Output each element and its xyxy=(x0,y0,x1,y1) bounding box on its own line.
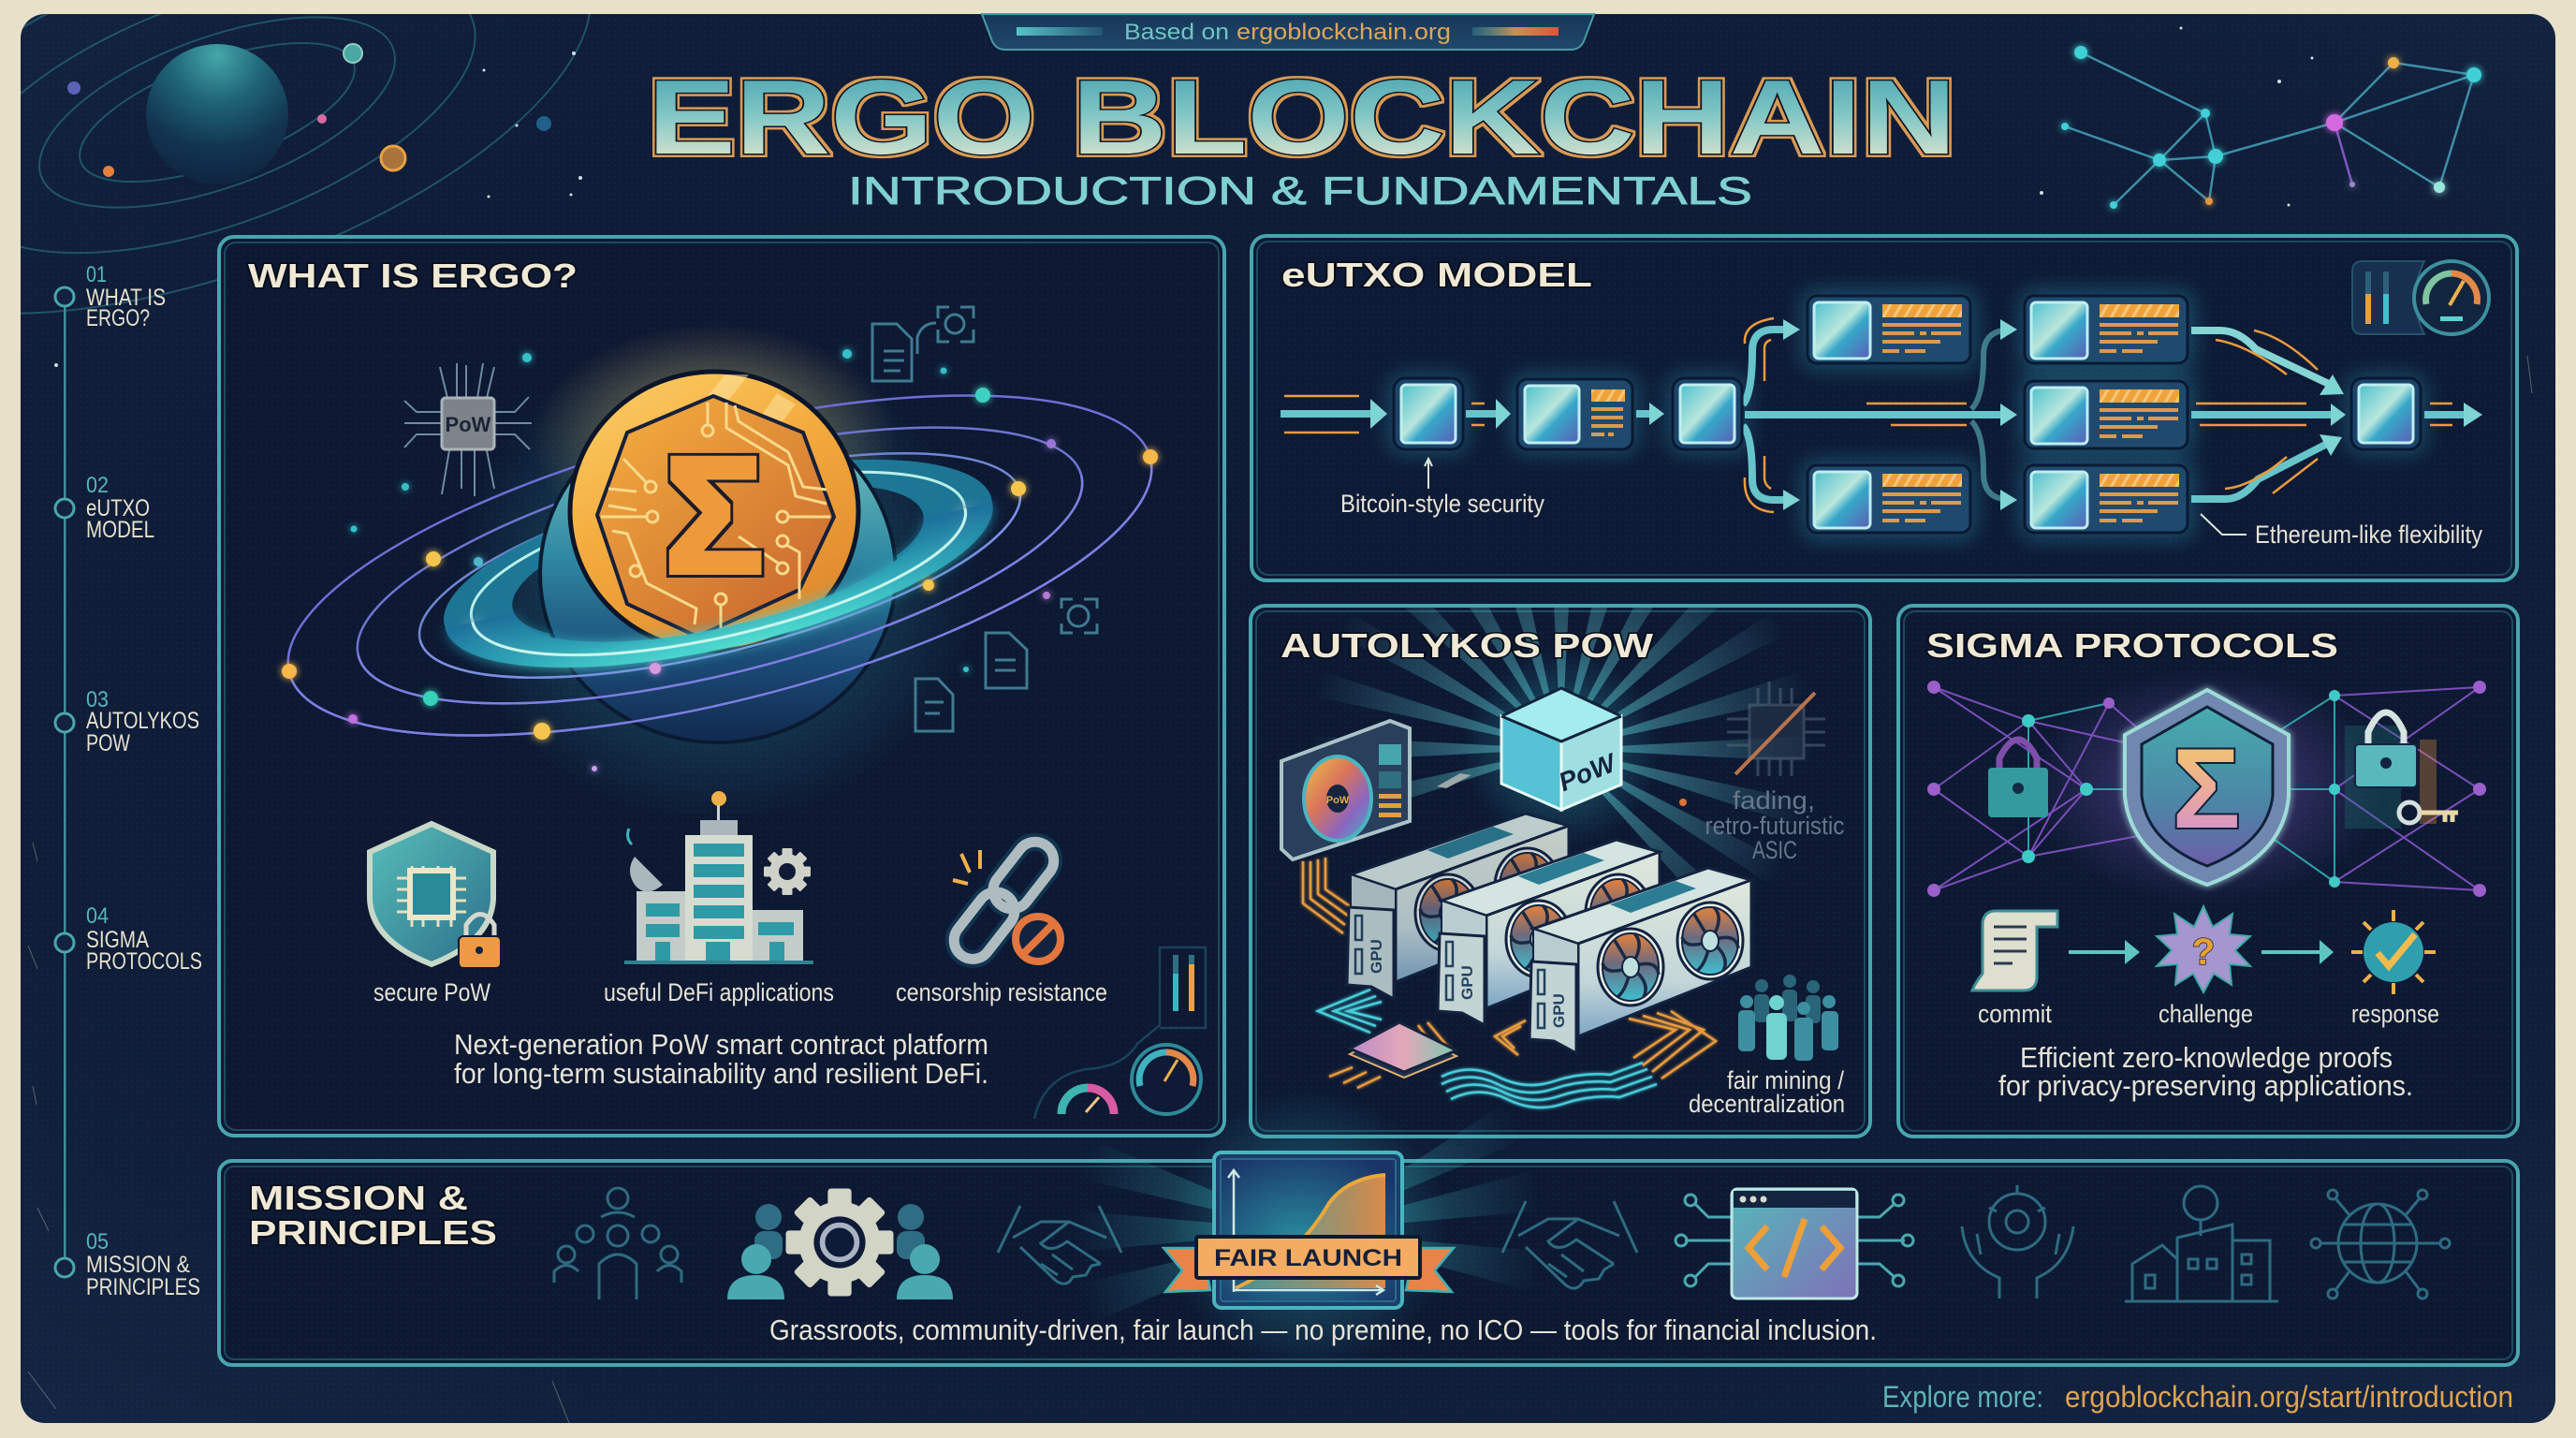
nav item 02 xyxy=(86,473,154,543)
nav item 05: 05 xyxy=(86,1229,109,1255)
label: Bitcoin-style security xyxy=(1340,459,1544,518)
description: for long-term sustainability and resilient DeFi. xyxy=(454,1057,988,1090)
title: ERGO BLOCKCHAIN xyxy=(648,58,1956,176)
icon: challenge star xyxy=(2157,906,2250,992)
label: fair mining xyxy=(1689,1066,1845,1118)
icon: globe network xyxy=(2311,1190,2450,1299)
source tab: Based on xyxy=(1124,20,1229,45)
icon: PoW chip: PoW xyxy=(446,413,491,436)
heading: eUTXO MODEL xyxy=(1281,256,1592,294)
icon: GPU display panel: PoW xyxy=(1326,795,1350,806)
icon: secure PoW shield xyxy=(370,824,501,968)
nav item 03 xyxy=(86,687,199,756)
label: response: response xyxy=(2351,1000,2439,1028)
icon: bright lock and key xyxy=(2345,712,2458,829)
icon: faded ASIC xyxy=(1727,682,1825,776)
label: censorship resistance: censorship resistance xyxy=(896,978,1107,1006)
source tab xyxy=(982,14,1594,50)
panel: autolykos pow xyxy=(1249,604,1872,1138)
icon: hands with gear xyxy=(1962,1185,2073,1299)
heading: AUTOLYKOS POW xyxy=(1281,626,1653,665)
icon: glowing PoW cube xyxy=(1463,651,1660,847)
icon: handshake left xyxy=(998,1206,1121,1284)
icon: contract documents bottom xyxy=(915,599,1097,731)
icon: code window xyxy=(1676,1189,1913,1299)
nav item 01 xyxy=(86,262,166,331)
heading xyxy=(249,1179,497,1252)
arrow xyxy=(2069,940,2140,964)
network illustration xyxy=(1927,669,2486,903)
description: Efficient zero-knowledge proofs xyxy=(2020,1041,2393,1074)
panel: mission and principles xyxy=(219,1091,2518,1372)
nav item 01: 01 xyxy=(86,262,107,287)
label: fair mining: fair mining / xyxy=(1727,1066,1844,1094)
icon: gear with people xyxy=(727,1189,953,1299)
footer link xyxy=(1882,1380,2513,1414)
label: fair mining: decentralization xyxy=(1689,1090,1845,1118)
nav item 04: 04 xyxy=(86,903,109,929)
icon: broken chain xyxy=(946,834,1061,966)
nav item 04: SIGMA xyxy=(86,927,149,953)
icon: commit scroll xyxy=(1972,911,2057,990)
icon: contract documents top xyxy=(872,307,973,381)
illustration: sigma coin and planet: Σ xyxy=(665,424,764,608)
label: challenge: challenge xyxy=(2159,1000,2253,1028)
label: commit: commit xyxy=(1978,1000,2052,1028)
mission statement: Grassroots, community-driven, fair launch — no premine, no ICO — tools for financial inclusion. xyxy=(769,1313,1877,1346)
light rays xyxy=(1327,608,1796,877)
nav item 05: PRINCIPLES xyxy=(86,1274,200,1300)
icon: gauges and sliders xyxy=(1034,947,1206,1119)
label: fading ASIC: retro-futuristic xyxy=(1705,812,1844,840)
nav item 02: 02 xyxy=(86,473,109,498)
nav item 05: MISSION & xyxy=(86,1252,190,1278)
source tab: ergoblockchain.org xyxy=(1237,20,1451,45)
small meteor and spark xyxy=(1437,773,1687,806)
label: fading ASIC: fading, xyxy=(1733,786,1815,814)
chain flow diagram xyxy=(1281,290,2482,539)
footer link: ergoblockchain.org/start/introduction xyxy=(2065,1380,2513,1414)
nav item 04 xyxy=(86,903,202,975)
fair launch badge xyxy=(1074,1091,1542,1372)
label: Bitcoin-style security: Bitcoin-style security xyxy=(1340,490,1544,518)
heading: SIGMA PROTOCOLS xyxy=(1926,626,2338,665)
label: fading ASIC xyxy=(1705,786,1844,864)
label: Ethereum-like flexibility xyxy=(2201,514,2482,549)
description xyxy=(454,1028,988,1090)
description: Next-generation PoW smart contract platform xyxy=(454,1028,988,1061)
label: Ethereum-like flexibility: Ethereum-like flexibility xyxy=(2255,521,2482,549)
nav item 01: ERGO? xyxy=(86,305,150,331)
nav item 03: POW xyxy=(86,730,130,756)
icon: DeFi building xyxy=(624,791,813,964)
arrow xyxy=(2261,940,2334,964)
description: for privacy-preserving applications. xyxy=(1998,1069,2413,1102)
nav item 02: eUTXO xyxy=(86,495,150,521)
icon: gauge and sliders xyxy=(2352,261,2489,334)
icon: GPU display panel xyxy=(1281,721,1410,859)
panel: what is ergo xyxy=(219,237,1224,1136)
stars xyxy=(54,26,2314,367)
nav item 03: AUTOLYKOS xyxy=(86,708,199,734)
strike through xyxy=(1735,693,1815,774)
icon: faded lock xyxy=(1988,740,2048,817)
icon: response check xyxy=(2351,910,2436,994)
paper wear marks xyxy=(28,356,2532,1432)
planet system illustration xyxy=(21,14,591,315)
label: useful DeFi applications: useful DeFi applications xyxy=(604,978,834,1006)
sidebar navigation xyxy=(55,262,202,1300)
description xyxy=(1998,1041,2413,1102)
icon: PoW chip xyxy=(404,363,532,496)
GPU cards xyxy=(1347,814,1751,1053)
heading: PRINCIPLES xyxy=(249,1213,497,1252)
icon: city buildings xyxy=(2125,1186,2278,1301)
icon: glowing PoW cube: PoW xyxy=(1555,747,1621,797)
subtitle: INTRODUCTION & FUNDAMENTALS xyxy=(848,169,1752,213)
nav item 01: WHAT IS xyxy=(86,285,166,311)
nav item 04: PROTOCOLS xyxy=(86,948,202,975)
nav item 03: 03 xyxy=(86,687,109,712)
icon: handshake right xyxy=(1502,1201,1637,1288)
footer link: Explore more: xyxy=(1882,1380,2043,1414)
icon: miners xyxy=(1738,975,1838,1061)
label: secure PoW: secure PoW xyxy=(373,978,490,1006)
icon: challenge star: ? xyxy=(2192,932,2215,973)
nav item 02: MODEL xyxy=(86,517,154,543)
panel: sigma protocols xyxy=(1898,606,2518,1137)
constellation illustration xyxy=(2061,46,2481,209)
icon: sigma shield xyxy=(2125,690,2289,885)
fair launch badge: FAIR LAUNCH xyxy=(1214,1245,1402,1271)
wiring traces xyxy=(1303,858,1716,1108)
icon: sigma shield: Σ xyxy=(2172,725,2241,852)
illustration: sigma coin and planet xyxy=(256,323,1183,824)
heading: MISSION & xyxy=(249,1179,468,1217)
icon: chip xyxy=(1350,1022,1456,1078)
panel: eUTXO model xyxy=(1251,236,2517,580)
nav item 05 xyxy=(86,1229,200,1300)
icon: community outline xyxy=(554,1188,681,1299)
heading: WHAT IS ERGO? xyxy=(248,257,578,295)
label: fading ASIC: ASIC xyxy=(1752,836,1797,864)
